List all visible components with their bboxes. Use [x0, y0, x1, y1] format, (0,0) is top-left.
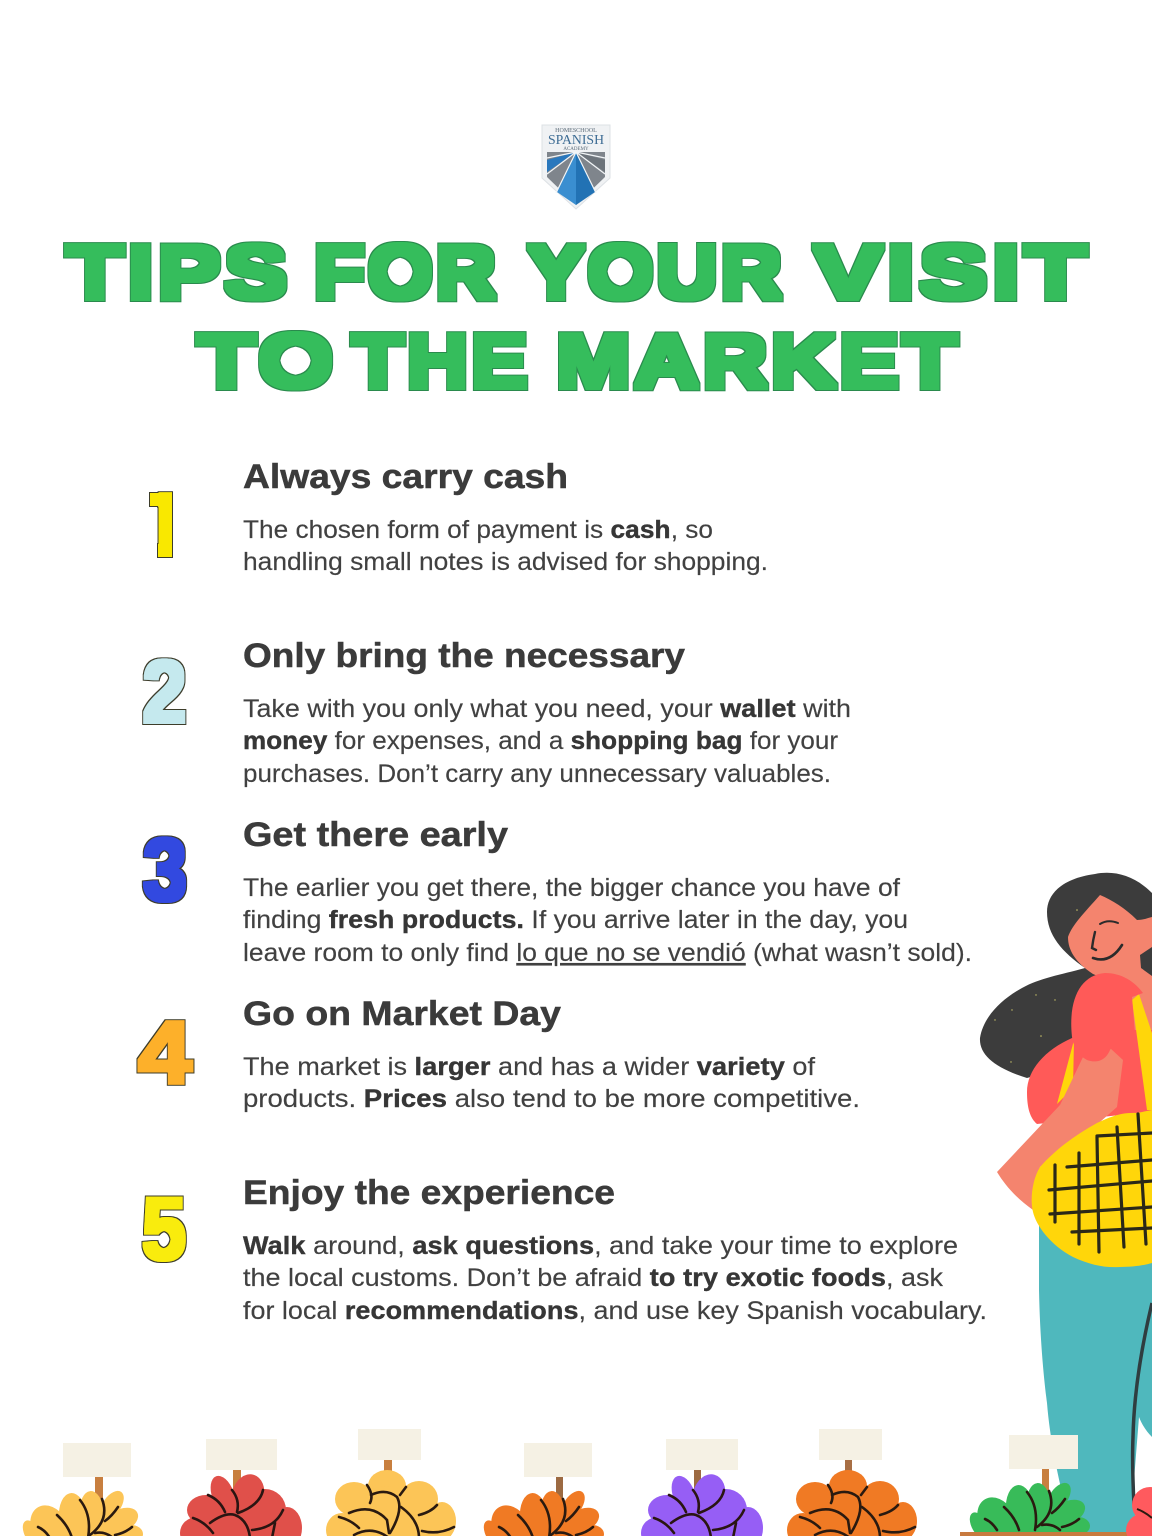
tip 3 heading: Get there early: [243, 816, 508, 854]
tip 2: only bring the necessary: [142, 637, 851, 788]
stall 1: yellow produce: [19, 1443, 143, 1536]
tip 2 heading: Only bring the necessary: [243, 637, 685, 675]
stall 5: purple produce: [641, 1439, 763, 1536]
title: MARKET: [556, 319, 961, 403]
left bag strap: [1057, 1040, 1074, 1104]
trouser seam: [1133, 1303, 1152, 1505]
title: FOR: [314, 230, 499, 314]
stall 7: green produce in crate: [960, 1435, 1130, 1536]
tip 3 body: leave room to only find lo que no se vendió (what wasn’t sold).: [243, 939, 972, 967]
tip 5 heading: Enjoy the experience: [243, 1174, 615, 1212]
torso: [1027, 1020, 1152, 1124]
bag net: [1049, 1114, 1152, 1252]
tip 4 body: The market is larger and has a wider variety of: [243, 1053, 815, 1081]
tip 1 body: handling small notes is advised for shopping.: [243, 548, 768, 576]
number 2: 2: [142, 642, 186, 741]
tip 5: enjoy the experience: [142, 1174, 987, 1325]
arm: [997, 1048, 1123, 1210]
tip 3 body: finding fresh products. If you arrive later in the day, you: [243, 906, 908, 934]
market stall row: [19, 1429, 1152, 1536]
tip 3: get there early: [143, 816, 972, 967]
logo: Homeschool Spanish Academy shield: SPANISH: [548, 133, 604, 148]
stall 6: orange produce: [787, 1429, 917, 1536]
number 5: 5: [142, 1179, 186, 1278]
face details: [1092, 921, 1122, 959]
tip 4 heading: Go on Market Day: [243, 995, 561, 1033]
tip 5 body: for local recommendations , and use key Spanish vocabulary.: [243, 1297, 987, 1325]
tip 5 body: Walk around, ask questions , and take your time to explore: [243, 1232, 958, 1260]
tip 1 heading: Always carry cash: [243, 458, 568, 496]
sleeve: [1071, 973, 1143, 1061]
number 3: 3: [143, 820, 187, 919]
title: YOUR: [528, 230, 785, 314]
face and neck: [1068, 895, 1152, 1030]
trousers: [1039, 1225, 1152, 1536]
logo: Homeschool Spanish Academy shield: ACADEMY: [563, 147, 589, 152]
stall 4: orange produce: [480, 1443, 604, 1536]
tip 1 body: [243, 516, 768, 576]
tip 2 body: [243, 695, 851, 788]
tip 5 body: [243, 1232, 987, 1325]
title: TIPS: [66, 230, 291, 314]
title: VISIT: [814, 230, 1091, 314]
tip 2 body: purchases. Don’t carry any unnecessary valuables.: [243, 760, 831, 788]
red produce at right edge: [1126, 1487, 1152, 1536]
number 1: 1: [140, 475, 189, 574]
shopping bag: [1032, 1110, 1152, 1267]
logo: Homeschool Spanish Academy shield: [542, 125, 610, 209]
tip 1 body: The chosen form of payment is cash, so: [243, 516, 713, 544]
stall 2: red produce: [180, 1439, 302, 1536]
tip 2 body: money for expenses, and a shopping bag for your: [243, 727, 838, 755]
right bag strap: [1132, 994, 1152, 1110]
title: [66, 230, 1091, 403]
number 4: 4: [138, 1003, 192, 1102]
tip 5 body: the local customs. Don’t be afraid to try exotic foods , ask: [243, 1264, 944, 1292]
tip 4 body: [243, 1053, 860, 1113]
tip 1: always carry cash: [140, 458, 768, 576]
tip 3 body: The earlier you get there, the bigger chance you have of: [243, 874, 900, 902]
tip 3 body: [243, 874, 972, 967]
tip 4 body: products. Prices also tend to be more competitive.: [243, 1085, 860, 1113]
tip 4: go on market day: [138, 995, 860, 1113]
number 1: [149, 491, 173, 558]
logo: Homeschool Spanish Academy shield: HOMESCHOOL: [555, 128, 597, 134]
title: THE: [352, 319, 531, 403]
white gap between legs: [1134, 1417, 1152, 1536]
hair patch behind neck: [1140, 947, 1152, 976]
stall 3: yellow produce: [326, 1429, 456, 1536]
tip 2 body: Take with you only what you need, your wallet with: [243, 695, 851, 723]
illustration: woman with shopping bag: [980, 873, 1152, 1536]
title: TO: [197, 319, 337, 403]
hair: [980, 873, 1152, 1078]
